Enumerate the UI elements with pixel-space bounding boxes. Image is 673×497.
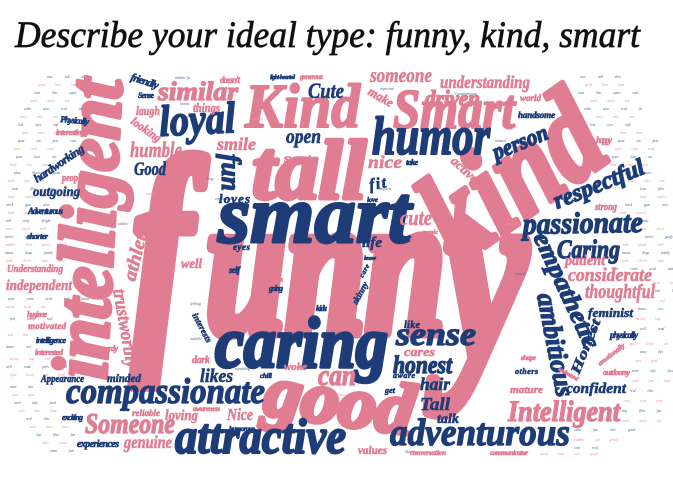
word: Good: Good	[134, 159, 166, 180]
word: loves: loves	[219, 191, 250, 206]
word: talk: talk	[437, 412, 459, 427]
word: others: others	[515, 367, 538, 376]
tiny words: left margin: lean film song	[12, 187, 55, 191]
word: Tall: Tall	[420, 394, 450, 414]
tiny words: right margin: style calm nerd laid	[612, 267, 673, 271]
word: light-hearted: light-hearted	[270, 75, 296, 81]
word: nerdy: nerdy	[102, 344, 118, 353]
word: loyal: loyal	[158, 93, 237, 146]
tiny words: right margin: wise neat pure	[624, 399, 663, 403]
tiny words: scattered inside: beautiful	[250, 117, 263, 121]
word: nice: nice	[368, 152, 402, 172]
word: love: love	[367, 196, 378, 204]
word: doesn't: doesn't	[220, 75, 240, 85]
tiny words: right margin: good hair kind	[585, 83, 624, 87]
tiny words: left margin: open warm fair	[30, 99, 71, 103]
tiny words: right margin: nerd tidy food	[632, 369, 673, 373]
tiny words: scattered inside: athlete	[118, 222, 128, 226]
word: loving: loving	[165, 408, 198, 424]
word: athletic: athletic	[119, 217, 155, 283]
word: kind: kind	[392, 62, 632, 290]
word: I'm: I'm	[272, 275, 283, 284]
tiny words: right margin: goal lively wit	[630, 342, 669, 346]
word: kids: kids	[316, 304, 327, 313]
tiny words: left margin: faith clever open quiet	[6, 259, 66, 263]
tiny words: right margin: open warm art	[622, 419, 662, 423]
tiny words: left margin: eyes glad	[12, 393, 35, 397]
word: funny: y	[426, 130, 528, 414]
word: sweet: sweet	[283, 151, 312, 165]
tiny words: left margin: work gym wise	[6, 203, 50, 207]
word: independent: independent	[6, 278, 73, 294]
word: Smart: Smart	[393, 79, 516, 141]
word: hardworking: hardworking	[31, 141, 87, 185]
word: tall: tall	[252, 124, 367, 217]
word: woke: woke	[284, 361, 307, 373]
tiny words: left margin: food tidy zen	[8, 179, 45, 183]
tiny words: right margin: cook fine hope	[632, 379, 671, 383]
tiny words: right margin: eyes glad	[635, 359, 658, 363]
word: similar: similar	[157, 77, 239, 106]
word: humble: humble	[130, 137, 182, 162]
tiny words: scattered inside: important	[380, 87, 395, 91]
tiny words: scattered inside: long	[207, 177, 214, 181]
title: Describe your ideal type: funny, kind, smart	[14, 15, 642, 56]
tiny words: left margin: firm sane nice	[22, 131, 61, 135]
word: physically: physically	[609, 330, 639, 340]
word: someone: someone	[369, 65, 432, 87]
tiny words: scattered inside: communicate	[215, 197, 235, 201]
tiny words: left margin: fair lively real	[10, 317, 52, 321]
tiny words: right margin: faith clever open	[622, 259, 664, 263]
tiny words: scattered inside: multiple	[190, 337, 202, 341]
word: Appearance: Appearance	[40, 374, 84, 385]
tiny words: left margin: deep able true	[20, 115, 59, 119]
tiny words: right margin: lots eyes soft	[590, 123, 631, 127]
tiny words: right margin: mild gentle chill	[622, 243, 663, 247]
tiny words: right margin: sane fun	[640, 350, 663, 354]
tiny words: left margin: open warm art	[42, 441, 82, 445]
word: adventurous: adventurous	[390, 412, 570, 454]
word: Intelligent: Intelligent	[507, 395, 621, 428]
word: reliable: reliable	[132, 408, 160, 418]
tiny words: left margin: sweet goofy	[5, 235, 33, 239]
tiny words: right margin: easy cook read	[615, 147, 655, 151]
word: understand: understand	[557, 367, 580, 383]
medium pink words	[6, 65, 655, 457]
word: confident: confident	[566, 381, 627, 397]
tiny words: left margin: pure love art	[15, 155, 57, 159]
word: like: like	[404, 320, 421, 331]
tiny words: left margin: nice tall also	[47, 75, 88, 79]
word: people: people	[61, 173, 84, 184]
word: happy: happy	[596, 135, 613, 145]
word: Kind: Kind	[244, 73, 361, 141]
word: shorter: shorter	[26, 232, 49, 241]
tiny words: scattered inside: relaxed	[495, 139, 506, 143]
word: going: going	[268, 284, 283, 293]
tiny words: right margin: cool like sport real	[578, 91, 638, 95]
tiny words: left margin: bold chic neat	[10, 163, 49, 167]
tiny words: right margin: humble soft gentle	[574, 438, 619, 442]
tiny words: left margin: goal lively wit bold	[10, 373, 65, 377]
word: cares: cares	[404, 344, 435, 359]
word: good: good	[258, 350, 420, 451]
word: patient: patient	[563, 253, 606, 269]
word: smart: smart	[217, 169, 413, 260]
word: make: make	[366, 84, 397, 110]
word: motivated: motivated	[28, 321, 66, 331]
word: can: can	[318, 359, 356, 392]
tiny words: left margin: music dogs family cool	[5, 251, 71, 255]
word: fit: fit	[368, 174, 388, 194]
tiny words: left margin: goal wit pets care	[18, 139, 77, 143]
word: laugh: laugh	[136, 103, 160, 118]
word: sense: sense	[395, 317, 476, 353]
word: get: get	[384, 386, 396, 395]
tiny words: left margin: style calm nerd laid funny art	[8, 297, 106, 301]
tiny words: left margin: lots eyes soft	[18, 123, 59, 127]
word: shape: shape	[520, 354, 536, 362]
tiny words: right margin: music dogs family	[622, 251, 670, 255]
tiny words: right margin: firm sane	[620, 131, 643, 135]
word: strong: strong	[594, 202, 617, 213]
word: Someone: Someone	[85, 408, 175, 440]
word: ambitious: ambitious	[531, 290, 581, 399]
word: humorous: humorous	[229, 425, 255, 433]
word: trustworthy: trustworthy	[108, 287, 143, 370]
tiny words: left margin: nerd tidy food	[14, 401, 56, 405]
word: communicator: communicator	[490, 449, 528, 457]
tiny words: right margin: sane loyal	[640, 227, 664, 231]
word: world: world	[520, 93, 542, 103]
tiny words: left margin: cool like sport	[34, 91, 78, 95]
tiny words: right margin: open warm fair	[590, 99, 631, 103]
tiny words: scattered inside: Compassionate	[455, 92, 478, 96]
tiny words: scattered inside: outside	[146, 192, 157, 196]
tiny words: right margin: lean film	[640, 187, 664, 191]
tiny words: left margin: wise neat pure	[30, 425, 69, 429]
tiny words: scattered inside: thoughtful	[180, 115, 195, 119]
word: driven: driven	[425, 86, 480, 111]
tiny words: right margin: warm kind eyes good	[540, 452, 598, 456]
tiny words: left margin: sane loyal mild	[6, 227, 46, 231]
word: interested: interested	[35, 348, 64, 357]
word: looking: looking	[128, 114, 164, 145]
word: friendly: friendly	[129, 71, 160, 92]
tiny words: scattered inside: intentional	[505, 222, 521, 226]
word: exciting: exciting	[62, 413, 83, 422]
word: life: life	[362, 235, 382, 251]
word: experiences: experiences	[77, 439, 119, 450]
tiny words: left margin: dance tea	[6, 345, 31, 349]
tiny words: right margin: deep able true	[596, 115, 635, 119]
word: emotionally: emotionally	[596, 341, 627, 368]
tiny words: right margin: calm wise real fit	[584, 107, 643, 111]
tiny words: left margin: calm fair	[50, 449, 75, 453]
tiny words: left margin: calm wise real fit	[24, 107, 83, 111]
word: open: open	[286, 126, 321, 148]
tiny words: left margin: strong hug real	[10, 357, 50, 361]
tiny words: scattered inside: Divorce	[335, 393, 348, 397]
word: respectful: respectful	[550, 154, 649, 215]
word: Adventurous: Adventurous	[27, 206, 63, 216]
word: chill: chill	[260, 372, 272, 380]
word: empathetic: empathetic	[528, 228, 605, 353]
tiny words: left margin: soft like	[8, 333, 29, 337]
word: awareness: awareness	[193, 405, 220, 413]
word: thoughtful: thoughtful	[585, 281, 655, 303]
tiny words: left margin: kind poised	[8, 211, 34, 215]
word: Understanding: Understanding	[7, 263, 63, 275]
tiny words: right margin: bold chic neat	[610, 163, 649, 167]
word: conversation: conversation	[410, 449, 446, 457]
word: understanding: understanding	[440, 72, 530, 92]
word: hair: hair	[420, 374, 451, 394]
word: attractive: attractive	[175, 408, 346, 464]
tiny words: right margin: tall witty	[625, 219, 649, 223]
word: know: know	[364, 256, 377, 262]
word: funny: funn	[132, 110, 445, 387]
tiny words: right margin: plan brave	[624, 171, 652, 175]
tiny words: left margin: hope stable	[8, 195, 34, 199]
tiny words: right margin: nice tall also	[580, 75, 621, 79]
word: smile: smile	[216, 134, 256, 154]
tiny words: left margin: plan brave game	[13, 171, 61, 175]
tiny words: scattered inside: mutual	[515, 272, 525, 276]
word: values: values	[358, 443, 387, 457]
tiny words: right margin: sweet goofy	[645, 235, 673, 239]
word: self: self	[228, 265, 241, 275]
tiny words: right margin: pure love art	[611, 155, 653, 159]
word: hygiene: hygiene	[27, 310, 47, 319]
word: cute: cute	[400, 205, 432, 230]
tiny words: right margin: well read	[640, 327, 665, 331]
word: aware: aware	[393, 371, 415, 380]
word: Physically: Physically	[60, 114, 91, 127]
word: likes: likes	[200, 366, 233, 387]
word: honest: honest	[393, 352, 453, 379]
tiny words: right margin: calm fair nice good	[574, 428, 635, 432]
tiny words: right margin: hope stable	[640, 195, 666, 199]
word: genuine: genuine	[123, 432, 172, 452]
word: take: take	[406, 158, 418, 167]
tiny words: left margin: humble mild gentle chill	[5, 243, 67, 247]
tiny words: left margin: sane fun	[10, 385, 33, 389]
word: Nice: Nice	[226, 405, 253, 424]
word: person: person	[487, 120, 552, 165]
word: well: well	[181, 257, 202, 272]
word: active: active	[448, 153, 482, 186]
tiny words: scattered inside: chemistry	[565, 197, 579, 201]
tiny words: scattered inside: feelings	[190, 302, 202, 306]
tiny words: left margin: easy cook read	[14, 147, 54, 151]
word: interests: interests	[190, 311, 214, 345]
word: skinny: skinny	[349, 279, 371, 307]
tiny words: right margin: trip film fun	[622, 409, 661, 413]
tiny words: left margin	[5, 75, 106, 453]
tiny words: scattered inside: athletic-fit	[175, 76, 191, 80]
word: music: music	[423, 230, 438, 236]
tiny words: left margin: cook fine hope	[18, 409, 57, 413]
word: Sense: Sense	[138, 91, 154, 100]
tiny words: right margin: work gym wise	[625, 203, 669, 207]
word: care: care	[358, 263, 371, 279]
word: feminist: feminist	[588, 305, 633, 320]
tiny words: left margin: tall witty bright	[6, 219, 51, 223]
tiny words: right margin: cool real	[574, 446, 598, 450]
tiny words: right margin: goal wit pets	[618, 139, 659, 143]
word: outdoorsy: outdoorsy	[603, 368, 630, 377]
small navy words	[26, 71, 639, 450]
tiny words: left margin: good hair kind	[38, 83, 77, 87]
word: eyes: eyes	[233, 242, 250, 252]
word: also: also	[410, 233, 430, 245]
word: Caring: Caring	[557, 235, 620, 264]
word: Honest: Honest	[568, 316, 605, 378]
tiny words: left margin: trip film fun	[36, 433, 75, 437]
word: caring: caring	[215, 303, 388, 383]
tiny words: left margin: well read girls cool pal	[6, 365, 83, 369]
tiny words: right margin: real chic	[630, 389, 654, 393]
word: Cute: Cute	[308, 78, 344, 103]
word: outgoing: outgoing	[33, 185, 80, 200]
tiny words: right margin	[540, 75, 673, 456]
tiny words: scattered inside: handle	[395, 202, 405, 206]
word: interesting: interesting	[56, 128, 85, 137]
tiny words: right margin: food tidy zen	[628, 179, 665, 183]
tiny words: scattered inside: something	[235, 367, 250, 371]
word: considerate: considerate	[568, 265, 653, 286]
word: intelligent: intelligent	[36, 75, 139, 381]
word: fun: fun	[216, 154, 246, 191]
word: minded: minded	[107, 371, 142, 385]
tiny words: scattered inside: likeable	[405, 450, 417, 454]
word: things: things	[193, 100, 220, 115]
word: passionate: passionate	[520, 206, 643, 241]
tiny words: left margin: warm fresh dry	[6, 305, 46, 309]
tiny words: right margin: strong hug	[636, 317, 661, 321]
word: humor: humor	[372, 106, 491, 166]
tiny words: scattered inside: honest	[180, 102, 190, 106]
tiny words: scattered inside	[118, 76, 579, 454]
word: generous: generous	[299, 73, 323, 81]
tiny words: scattered inside: confident	[378, 187, 392, 191]
word: intelligence: intelligence	[36, 336, 66, 345]
word: handsome: handsome	[518, 110, 555, 120]
word: mature: mature	[510, 384, 543, 396]
word: dark: dark	[192, 355, 210, 366]
tiny words: right margin: kind poised	[620, 211, 646, 215]
word: compassionate: compassionate	[66, 371, 265, 411]
tiny words: left margin: real chic	[26, 417, 50, 421]
